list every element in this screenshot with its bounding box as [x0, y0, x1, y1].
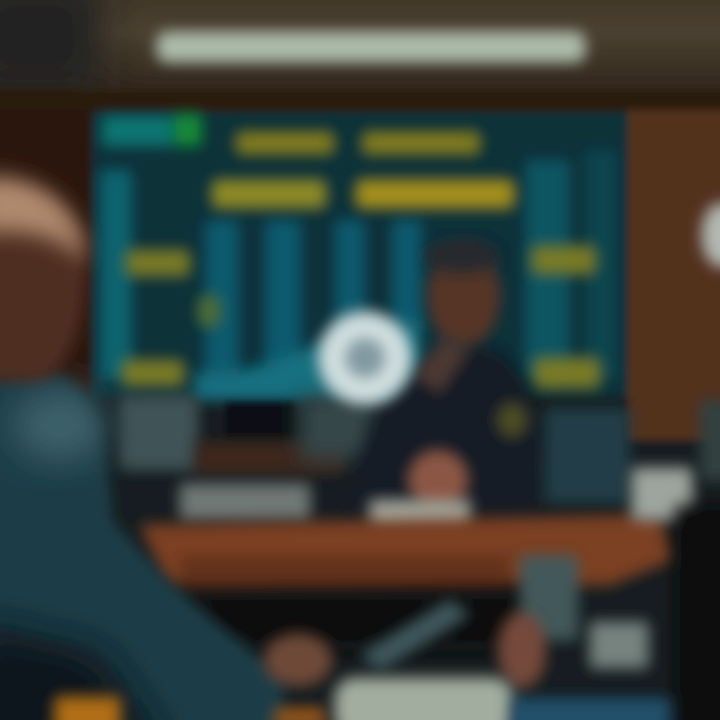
round white emblem — [319, 312, 411, 404]
screen chart columns — [205, 220, 422, 380]
right side white object — [632, 468, 692, 520]
left person hair — [0, 177, 86, 262]
left person hand — [264, 634, 332, 686]
presenter hand — [408, 450, 468, 510]
wooden table — [140, 515, 672, 650]
screen chart area — [195, 320, 420, 400]
desk items below screen — [120, 395, 375, 520]
screen side panels — [100, 170, 132, 380]
presentation screen — [92, 112, 628, 400]
orange object at the bottom — [55, 697, 120, 720]
foreground right figure — [675, 203, 720, 720]
presenter arm — [412, 335, 470, 395]
presenter badge — [496, 402, 528, 438]
screen side labels — [122, 246, 600, 388]
foreground left person — [0, 177, 332, 720]
screen logo — [102, 114, 202, 146]
screen headline blocks — [212, 132, 514, 208]
presenter hair — [424, 238, 500, 274]
left person head — [0, 187, 86, 380]
left person shoulder highlight — [12, 389, 108, 461]
left person torso — [0, 375, 285, 720]
left person lower shadow — [0, 620, 170, 720]
papers on desk — [370, 500, 470, 528]
presenter head — [428, 246, 500, 346]
presenter — [350, 238, 630, 528]
presenter body — [350, 345, 550, 515]
foreground centre items — [335, 555, 670, 720]
ceiling light — [157, 32, 585, 62]
